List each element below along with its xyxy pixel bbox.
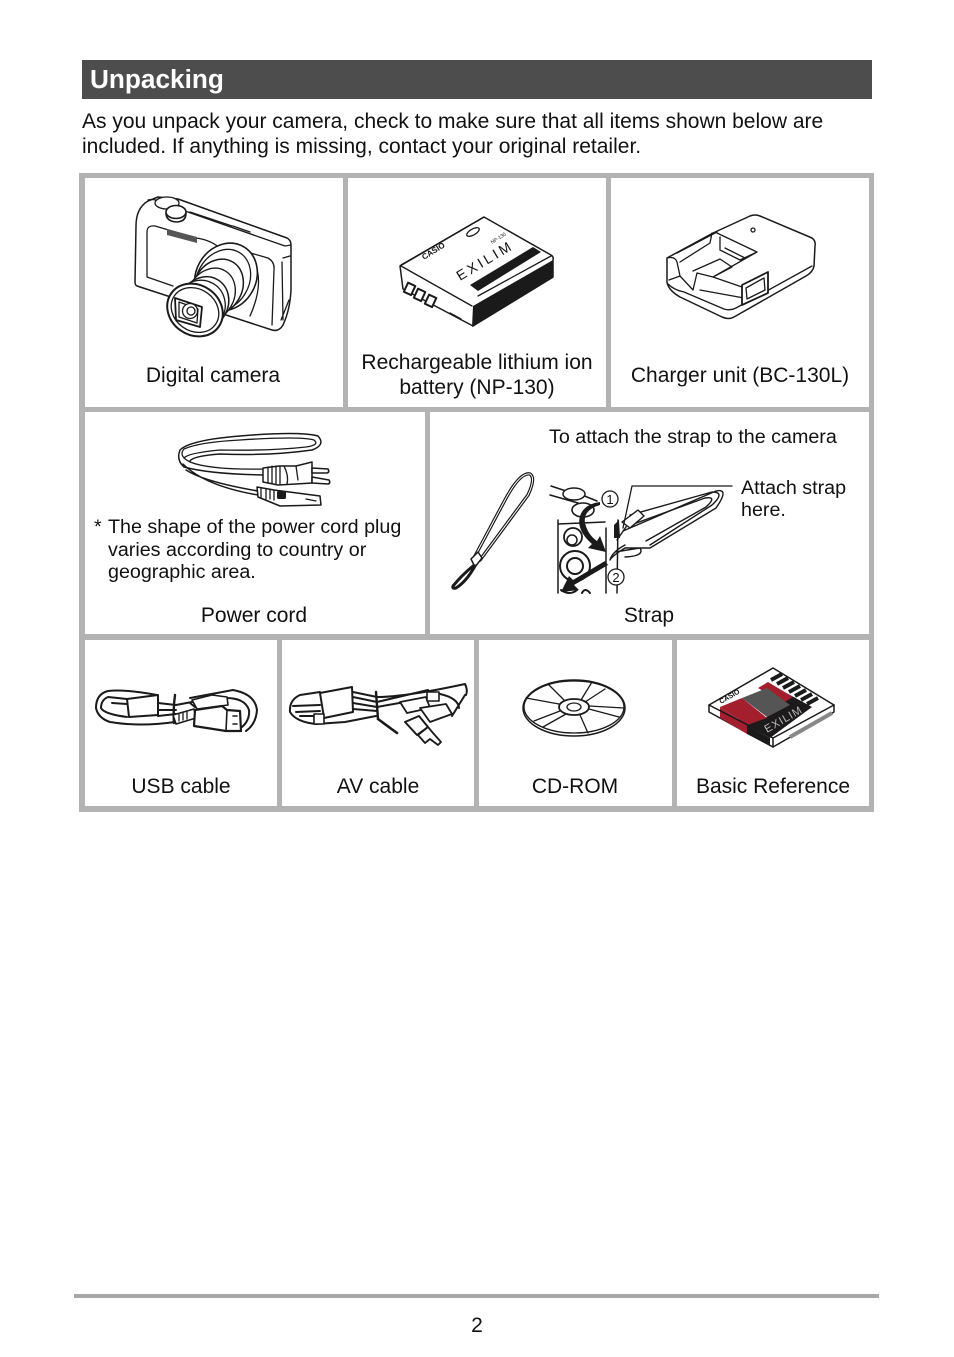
panel: charger <box>611 178 869 407</box>
icon: USB cable <box>96 690 257 731</box>
step 2 marker: 2 <box>612 570 620 585</box>
icon: battery <box>400 217 553 327</box>
intro text: As you unpack your camera, check to make sure that all items shown below are <box>82 110 823 133</box>
label: Basic Reference <box>696 775 850 798</box>
callout: Attach strap <box>741 477 846 499</box>
label: CD-ROM <box>532 775 618 798</box>
footnote: geographic area. <box>108 561 256 583</box>
panel: power cord <box>85 412 425 634</box>
callout: here. <box>741 499 786 521</box>
panel: CD-ROM <box>479 640 672 806</box>
heading bar: Unpacking: Unpacking <box>90 64 224 94</box>
panel: AV cable <box>282 640 474 806</box>
callout <box>741 477 846 521</box>
step 1 marker <box>602 491 618 507</box>
table frame <box>79 173 874 812</box>
footnote: The shape of the power cord plug <box>108 516 401 538</box>
footnote <box>94 516 401 583</box>
label <box>361 351 593 399</box>
icon: booklet: EXILIM <box>762 704 805 736</box>
panel: strap <box>430 412 869 634</box>
label: battery (NP-130) <box>399 376 555 399</box>
label: Digital camera <box>146 364 280 387</box>
icon: booklet <box>709 668 834 747</box>
icon: CD-ROM <box>523 680 625 736</box>
label: AV cable <box>337 775 419 798</box>
page number: 2 <box>471 1314 483 1337</box>
icon: battery: NP-130 <box>490 232 508 246</box>
icon: AV cable <box>290 684 467 745</box>
label: Power cord <box>201 604 307 627</box>
icon: charger <box>667 215 815 318</box>
icon: battery: CASIO <box>420 241 447 262</box>
label: Strap <box>624 604 674 627</box>
panel: USB cable <box>85 640 277 806</box>
footer rule <box>74 1294 879 1298</box>
label: Rechargeable lithium ion <box>361 351 593 374</box>
icon: booklet: CASIO <box>718 688 742 706</box>
heading bar: Unpacking <box>82 60 872 99</box>
caption: To attach the strap to the camera <box>549 426 837 448</box>
footnote: * <box>94 516 102 538</box>
illustration: attaching the strap to the camera <box>550 486 732 593</box>
icon: power cord <box>179 434 330 506</box>
intro text <box>82 110 823 158</box>
step 1 marker: 1 <box>606 492 614 507</box>
label: Charger unit (BC-130L) <box>631 364 849 387</box>
panel: battery <box>348 178 606 407</box>
intro text: included. If anything is missing, contact your original retailer. <box>82 135 641 158</box>
panel: digital camera <box>85 178 343 407</box>
icon: digital camera <box>135 197 291 347</box>
label: USB cable <box>131 775 231 798</box>
step 2 marker <box>608 569 624 585</box>
footnote: varies according to country or <box>108 539 367 561</box>
panel: basic reference <box>677 640 869 806</box>
icon: battery: EXILIM <box>453 237 516 284</box>
icon: wrist strap <box>453 474 533 588</box>
